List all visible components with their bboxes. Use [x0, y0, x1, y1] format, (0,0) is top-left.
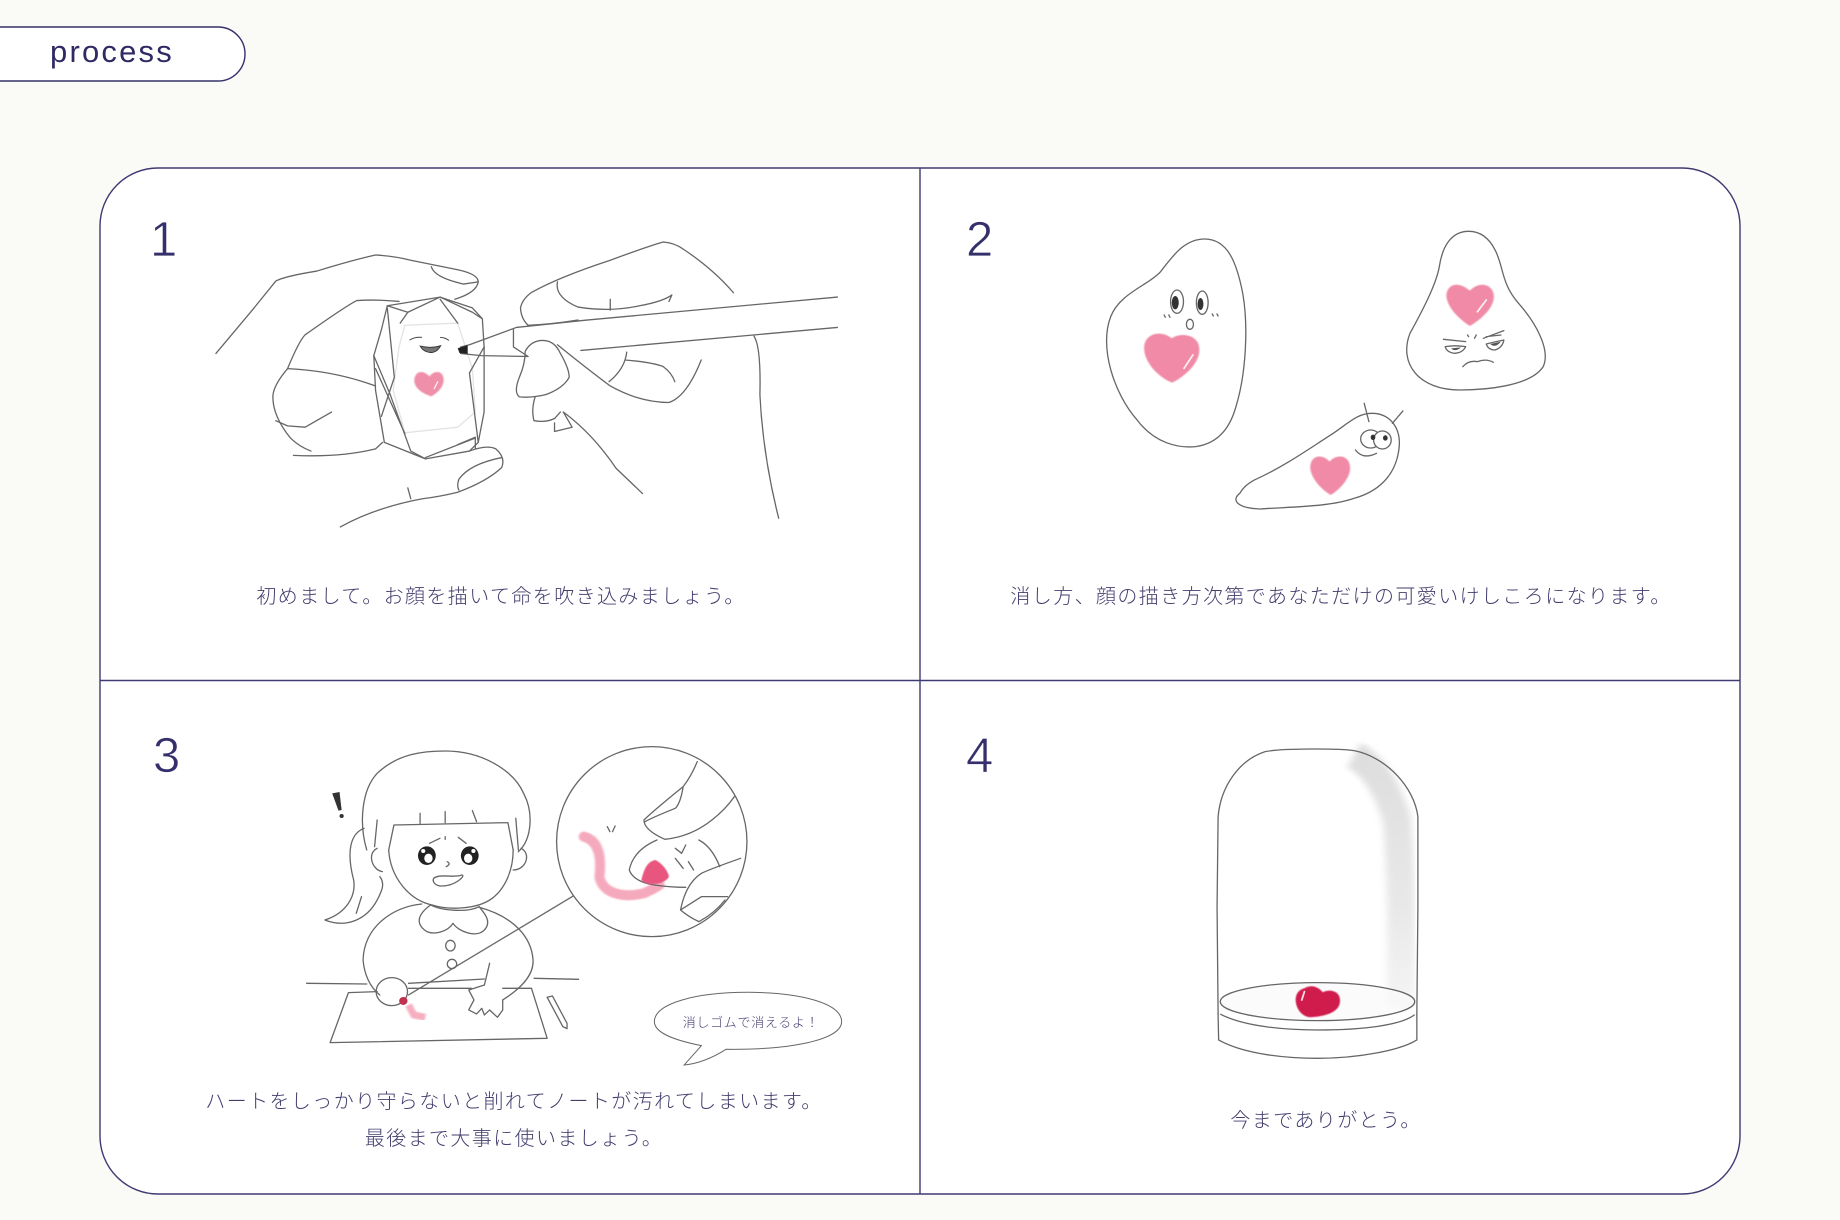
step number 3: 3: [153, 729, 180, 783]
step number 1: 1: [150, 213, 177, 267]
step number 4: 4: [966, 729, 993, 783]
character: grumpy eraser: [1407, 231, 1545, 390]
process grid frame: [100, 168, 1740, 1194]
header tab: process: [0, 27, 245, 81]
glass dome: [1217, 749, 1418, 1015]
illustration: hands drawing a face on the eraser: [216, 242, 837, 527]
icon: eraser gem: [374, 297, 484, 459]
magnified circle: [557, 747, 747, 937]
character: slug eraser: [1236, 403, 1403, 509]
panel: step 1: [100, 168, 920, 680]
dome highlight: [1354, 755, 1401, 1008]
panel: step 3: [100, 680, 920, 1194]
step number 2: 2: [966, 213, 993, 267]
caption step 3: ハートをしっかり守らないと削れてノートが汚れてしまいます。: [205, 1090, 823, 1113]
dome base: [1218, 983, 1417, 1058]
speech bubble: [654, 992, 842, 1065]
icon: pencil: [458, 297, 837, 357]
desk and paper: [307, 978, 579, 1043]
icon: pencil on desk: [547, 996, 567, 1029]
panel: step 4: [920, 680, 1740, 1194]
panel: step 2: [920, 168, 1740, 680]
caption step 1: 初めまして。お顔を描いて命を吹き込みましょう。: [256, 585, 746, 608]
illustration: three erasers with faces: [1107, 231, 1545, 509]
character: surprised eraser: [1107, 239, 1246, 447]
speech bubble text: 消しゴムで消えるよ！: [683, 1015, 819, 1030]
character: girl: [325, 751, 533, 1000]
caption step 4: 今までありがとう。: [1230, 1109, 1422, 1132]
header tab: process: process: [50, 34, 174, 69]
icon: red heart: [1296, 986, 1340, 1017]
magnifier pointer line: [409, 896, 573, 995]
caption step 3 line 2: 最後まで大事に使いましょう。: [365, 1127, 663, 1150]
caption step 2: 消し方、顔の描き方次第であなただけの可愛いけしころになります。: [1010, 585, 1672, 608]
illustration: girl using the eraser with magnified view: [307, 747, 842, 1065]
illustration: heart under a glass dome: [1217, 749, 1418, 1058]
